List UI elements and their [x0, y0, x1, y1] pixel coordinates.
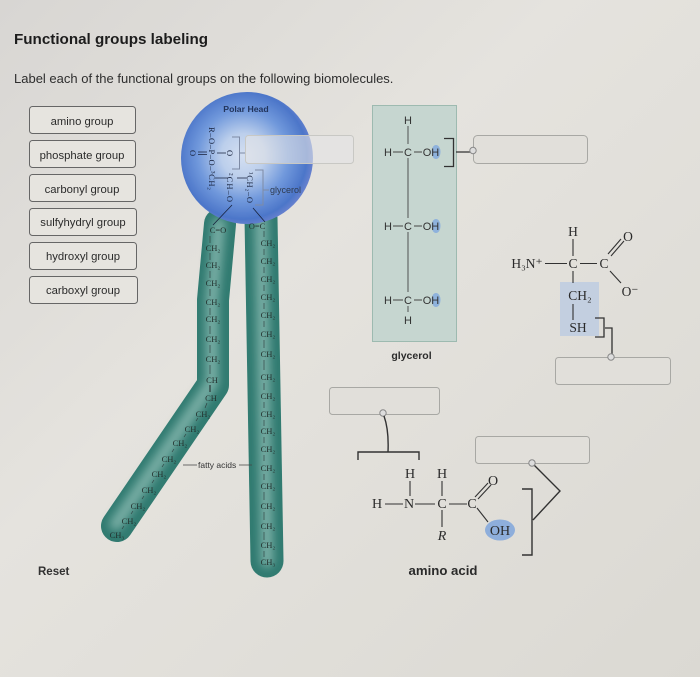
right tail chain: CH₂ — [261, 310, 275, 320]
right tail chain: CH₂ — [261, 274, 275, 284]
glycerol structure: C — [404, 221, 412, 233]
amino acid structure: H — [405, 467, 415, 482]
left tail chain: CH₂ — [206, 243, 220, 253]
glycerol bracket and connector — [444, 138, 473, 166]
label: phosphate group — [30, 140, 136, 168]
ester bonds — [213, 205, 265, 225]
glycerol structure: H — [404, 315, 412, 327]
left tail chain: CH₂ — [206, 354, 220, 364]
glycerol structure: C — [404, 147, 412, 159]
amino acid structure: N — [404, 497, 414, 512]
amino acid structure: H — [372, 497, 382, 512]
reset button: Reset — [38, 566, 69, 578]
instructions: Label each of the functional groups on the following biomolecules. — [14, 71, 393, 86]
left tail chain: CH₂ — [185, 424, 199, 434]
cysteine structure: O — [623, 229, 633, 244]
amino acid structure: R — [437, 529, 447, 544]
phospholipid diagram — [110, 92, 313, 567]
left tail chain: CH₂ — [206, 260, 220, 270]
cysteine structure: C — [599, 256, 609, 271]
drop target: carboxyl — [476, 436, 590, 466]
drop target: hydroxyl — [470, 136, 588, 164]
left tail chain: CH — [205, 393, 217, 403]
left tail chain: CH₂ — [206, 297, 220, 307]
glycerol panel — [372, 106, 456, 342]
cysteine structure: C — [568, 256, 578, 271]
drop target: amino — [330, 388, 440, 416]
right tail chain: CH₂ — [261, 238, 275, 248]
right tail chain: CH₂ — [261, 409, 275, 419]
label: sulfyhydryl group — [30, 208, 136, 236]
label: carbonyl group: carbonyl group — [45, 184, 119, 196]
amino acid structure: O — [488, 474, 498, 489]
left tail chain: CH₂ — [196, 409, 210, 419]
left tail chain: CH₂ — [206, 314, 220, 324]
right tail chain: CH₂ — [261, 501, 275, 511]
glycerol label: glycerol — [270, 185, 301, 195]
glycerol structure: H — [384, 147, 392, 159]
fatty acids label: fatty acids — [198, 460, 236, 470]
label: amino group: amino group — [51, 116, 113, 128]
left tail chain: CH₂ — [206, 334, 220, 344]
phosphate structure: O — [225, 150, 235, 156]
glycerol structure: H — [404, 115, 412, 127]
drop target: sulfhydryl — [556, 354, 670, 384]
polar head circle — [181, 92, 313, 224]
right tail chain: CH₃ — [261, 557, 275, 567]
right tail chain: CH₂ — [261, 521, 275, 531]
right tail chain: CH₂ — [261, 463, 275, 473]
left tail chain: CH₂ — [142, 485, 156, 495]
cysteine structure: H₃N⁺ — [511, 256, 543, 271]
right tail chain: CH₂ — [261, 426, 275, 436]
right tail chain: CH₂ — [261, 540, 275, 550]
cysteine structure: O⁻ — [622, 284, 638, 299]
right tail chain: O=C — [249, 221, 266, 231]
label: hydroxyl group: hydroxyl group — [46, 251, 120, 263]
left tail chain: CH₂ — [131, 501, 145, 511]
glycerol bracket — [255, 170, 269, 205]
label: carboxyl group: carboxyl group — [46, 285, 120, 297]
cysteine structure — [511, 224, 638, 336]
drop target: polar head — [246, 136, 354, 164]
glycerol structure: OH — [423, 147, 439, 159]
carboxyl hydroxyl highlight — [485, 520, 515, 540]
polar head label: Polar Head — [223, 104, 269, 114]
glycerol structure: OH — [423, 295, 439, 307]
right tail chain: CH₂ — [261, 372, 275, 382]
sulfhydryl bracket and connector — [595, 318, 612, 357]
phosphate structure: O — [188, 150, 198, 156]
phosphate structure — [188, 127, 255, 203]
cysteine structure: H — [568, 224, 578, 239]
carboxyl bracket and connector — [522, 465, 560, 555]
glycerol structure: H — [384, 221, 392, 233]
left tail chain — [110, 225, 226, 540]
label bank — [30, 106, 138, 304]
amino acid structure: C — [437, 497, 447, 512]
right tail chain: CH₂ — [261, 329, 275, 339]
left tail chain: CH₂ — [206, 278, 220, 288]
right tail chain: CH₂ — [261, 391, 275, 401]
label: sulfyhydryl group: sulfyhydryl group — [40, 217, 126, 229]
glycerol structure: C — [404, 295, 412, 307]
fatty acid tail: left — [116, 224, 220, 526]
left tail chain: CH — [206, 375, 218, 385]
label: carbonyl group — [30, 174, 136, 202]
phosphate structure: ²CH–O — [225, 173, 235, 202]
polar head bracket — [232, 137, 246, 169]
label: carboxyl group — [30, 276, 138, 304]
right tail chain: CH₂ — [261, 444, 275, 454]
left tail chain: CH₂ — [162, 454, 176, 464]
label: amino group — [30, 106, 136, 134]
hydroxyl highlights — [432, 145, 440, 307]
left tail chain: CH₂ — [122, 516, 136, 526]
amino acid structure: H — [437, 467, 447, 482]
cysteine structure: SH — [569, 320, 587, 335]
fatty acids label — [183, 460, 252, 470]
right tail chain — [249, 221, 275, 567]
left tail chain: CH₂ — [152, 469, 166, 479]
glycerol structure — [384, 115, 439, 327]
cysteine structure: CH₂ — [568, 288, 592, 303]
glycerol structure: OH — [423, 221, 439, 233]
left tail chain: C=O — [210, 225, 226, 235]
right tail chain: CH₂ — [261, 256, 275, 266]
amino bracket and connector — [358, 416, 419, 460]
thiol highlight — [560, 282, 599, 336]
right tail chain: CH₂ — [261, 481, 275, 491]
right tail chain: CH₂ — [261, 292, 275, 302]
left tail chain: CH₃ — [110, 530, 124, 540]
amino acid caption: amino acid — [409, 563, 477, 578]
phosphate structure: R–O–P–O–³CH₂ — [207, 127, 217, 190]
title: Functional groups labeling — [14, 31, 208, 48]
label: hydroxyl group — [30, 242, 136, 270]
label: phosphate group: phosphate group — [40, 150, 124, 162]
left tail chain: CH₂ — [173, 438, 187, 448]
amino acid structure: C — [467, 497, 477, 512]
phosphate structure: ¹CH₂–O — [245, 172, 255, 203]
right tail chain: CH₂ — [261, 349, 275, 359]
glycerol caption: glycerol — [391, 350, 432, 362]
amino acid structure — [372, 467, 515, 544]
amino acid structure: OH — [490, 524, 510, 539]
fatty acid tail: right — [261, 218, 267, 561]
glycerol structure: H — [384, 295, 392, 307]
